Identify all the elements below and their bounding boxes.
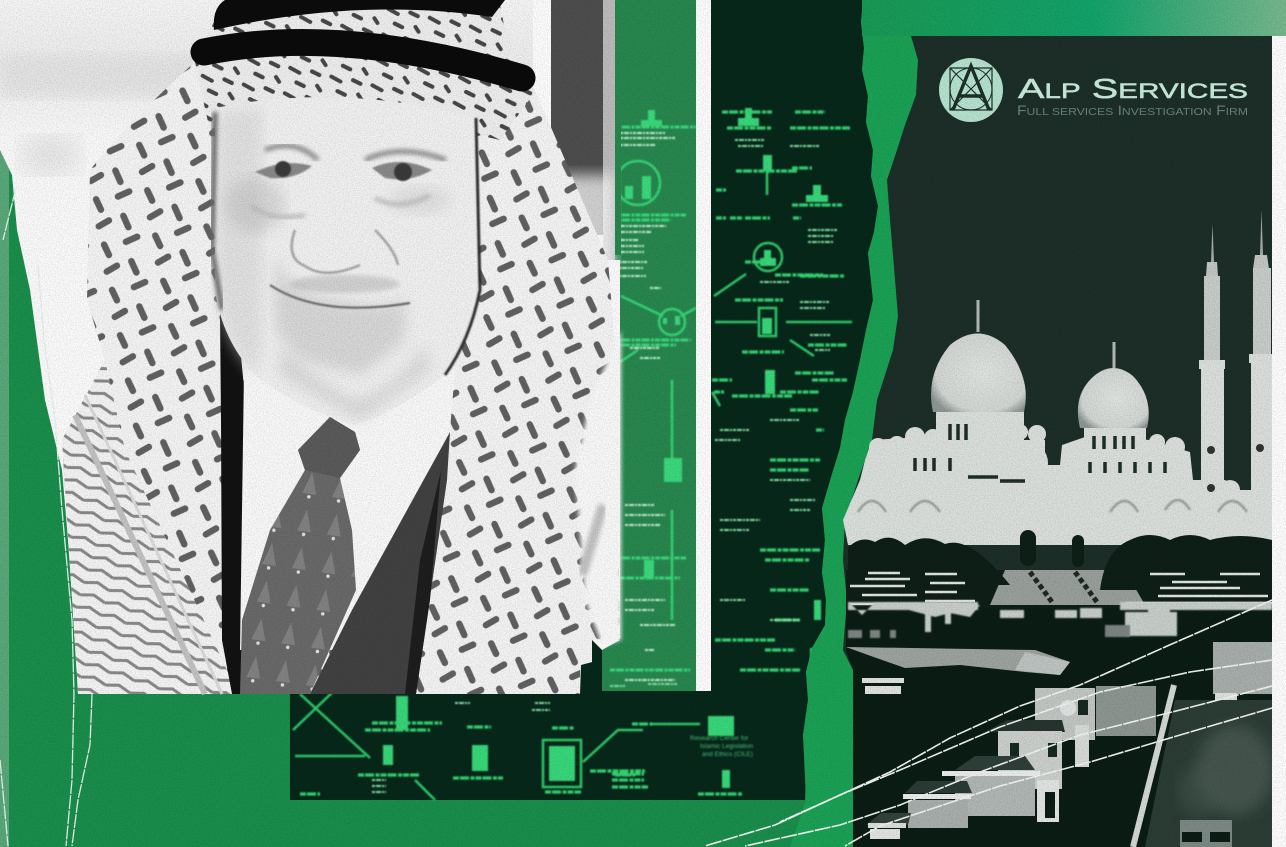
white vertical strip <box>696 0 711 691</box>
dark town <box>853 608 1272 847</box>
right cheek shadow <box>445 118 480 375</box>
main building mass <box>843 437 1272 545</box>
eyes <box>255 162 432 179</box>
minaret one <box>1199 224 1225 538</box>
face <box>212 97 480 425</box>
photo: portrait background <box>0 0 621 694</box>
left light green band <box>0 0 9 847</box>
herringbone edge <box>62 360 238 694</box>
readable network label: and Ethics (CILE) <box>702 751 753 758</box>
windows <box>915 424 1165 481</box>
terraces <box>850 573 1272 604</box>
black collar strip <box>220 312 247 694</box>
long roof <box>846 647 1070 675</box>
villas <box>862 678 1156 839</box>
readable network label: Research Center for <box>690 735 749 742</box>
white right margin <box>1272 36 1286 847</box>
eyebrows <box>265 146 446 160</box>
panel node icons <box>293 155 852 800</box>
white scratch lines left <box>0 188 92 846</box>
strip node icons <box>616 161 696 620</box>
head wrap <box>195 5 535 140</box>
mosque <box>843 210 1272 545</box>
nose <box>292 230 398 273</box>
mouth <box>270 285 410 308</box>
black agal ring <box>204 42 522 78</box>
small lower domes <box>858 500 1247 512</box>
big dome <box>931 300 1026 412</box>
logo: Alp Services <box>939 58 1248 122</box>
white fold at right <box>575 330 621 645</box>
panel: green network strip <box>602 0 696 691</box>
shirt <box>240 370 455 650</box>
photo: Abu Dhabi mosque panel <box>843 36 1273 847</box>
readable network label <box>690 735 753 758</box>
keffiyeh drape <box>62 30 620 694</box>
tagline: FULL SERVICES INVESTIGATION FIRM <box>1017 103 1248 118</box>
minaret two <box>1249 210 1272 540</box>
vest <box>310 432 450 694</box>
portrait: man in keffiyeh <box>62 0 621 694</box>
trees <box>848 530 1272 590</box>
night sky <box>843 36 1272 847</box>
lawn and steps <box>846 570 1272 620</box>
tie <box>240 417 360 694</box>
logo emblem <box>939 58 1003 122</box>
right grey building <box>1213 642 1272 694</box>
small dome <box>1078 342 1149 428</box>
far buildings <box>848 602 1272 636</box>
road edge <box>1133 685 1174 847</box>
green torn paper <box>790 0 920 847</box>
top gradient band <box>862 0 1286 36</box>
readable network label: Islamic Legislation <box>700 743 753 750</box>
lower right grey terrain <box>1145 700 1272 847</box>
white scratch lines right <box>705 600 1272 846</box>
company name: A LP S ERVICES <box>1018 73 1248 104</box>
black agal top <box>214 0 505 30</box>
panel: dark network map <box>290 0 878 800</box>
